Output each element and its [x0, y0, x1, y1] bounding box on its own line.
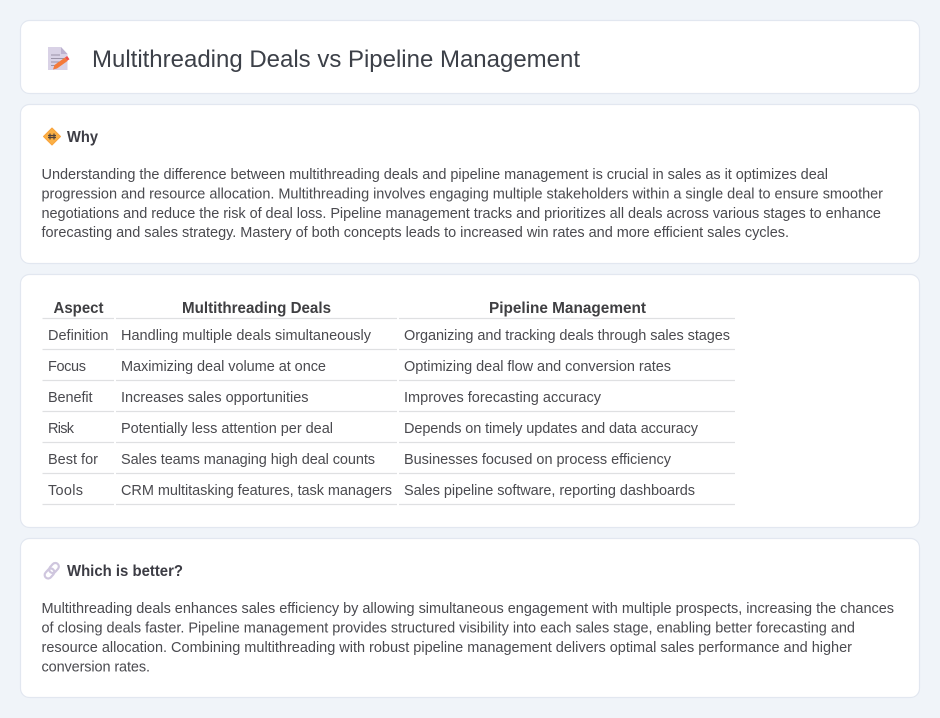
text block: why: negotiations and reduce the risk of deal loss. Pipeline management tracks and prioritizes all deals across various stages to enhance	[42, 206, 881, 222]
table header row: Multithreading Deals	[182, 300, 331, 317]
table row: definition: Handling multiple deals simultaneously	[121, 328, 372, 344]
table row: risk: Risk	[48, 421, 75, 437]
panel: title header	[20, 20, 920, 94]
heading: which is better: Which is better?	[67, 563, 183, 580]
table header row: Pipeline Management	[489, 300, 647, 317]
text block: why: forecasting and sales strategy. Mastery of both concepts leads to increased win rates and more efficient sales cycles.	[42, 225, 789, 241]
table row: definition: Definition	[48, 328, 108, 344]
table row: benefit	[42, 390, 735, 412]
table row: tools	[42, 483, 735, 504]
icon: chain link	[43, 562, 60, 580]
table row: risk: Potentially less attention per deal	[121, 421, 333, 437]
text block: which is better: conversion rates.	[42, 660, 150, 676]
text block: why: progression and resource allocation. Multithreading involves engaging multiple stakeholders within a single deal to ensure smoother	[42, 186, 883, 202]
table row: risk: Depends on timely updates and data accuracy	[404, 421, 699, 437]
heading: why: Why	[67, 129, 98, 146]
table row: tools: CRM multitasking features, task managers	[121, 483, 392, 499]
text block: why	[42, 167, 883, 241]
panel: which is better	[20, 538, 920, 698]
table row: benefit: Increases sales opportunities	[121, 390, 308, 406]
table row: focus	[42, 359, 735, 380]
table row: focus: Focus	[48, 359, 86, 375]
title: Multithreading Deals vs Pipeline Management	[92, 46, 580, 73]
table row: benefit: Improves forecasting accuracy	[404, 390, 602, 406]
table row: best for: Best for	[48, 452, 98, 468]
table row: benefit: Benefit	[48, 390, 92, 406]
table header row: Aspect	[54, 300, 104, 317]
text block: which is better: Multithreading deals enhances sales efficiency by allowing simultaneous engagement with multiple prospects, increasing the chances	[42, 601, 894, 617]
panel: comparison table	[20, 274, 920, 528]
table row: focus: Optimizing deal flow and conversion rates	[404, 359, 671, 375]
table row: tools: Tools	[48, 483, 83, 499]
table row: best for: Businesses focused on process efficiency	[404, 452, 672, 468]
table row: best for: Sales teams managing high deal counts	[121, 452, 375, 468]
panel: why	[20, 104, 920, 264]
table row: tools: Sales pipeline software, reporting dashboards	[404, 483, 695, 499]
table row: risk	[42, 421, 735, 442]
table header row	[42, 300, 735, 318]
text block: which is better	[42, 601, 894, 676]
table row: focus: Maximizing deal volume at once	[121, 359, 326, 375]
text block: why: Understanding the difference between multithreading deals and pipeline management is crucial in sales as it optimizes deal	[42, 167, 828, 183]
table row: best for	[42, 452, 735, 474]
text block: which is better: of closing deals faster. Pipeline management provides structured visibility into each sales stage, enabling better forecasting and	[42, 620, 855, 636]
table row: definition	[42, 328, 735, 350]
table row: definition: Organizing and tracking deals through sales stages	[404, 328, 730, 344]
text block: which is better: resource allocation. Combining multithreading with robust pipeline management delivers optimal sales performance and higher	[42, 640, 852, 656]
icon: memo with pencil	[48, 47, 70, 70]
icon: orange diamond sign	[44, 128, 60, 145]
